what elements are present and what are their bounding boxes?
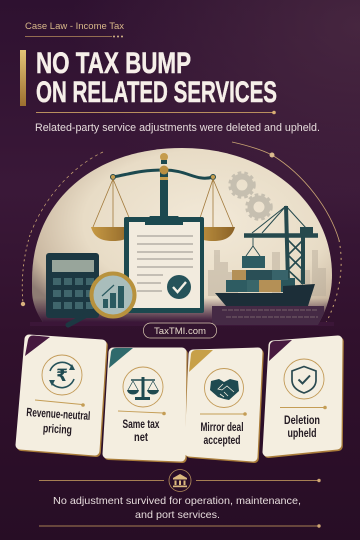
kicker: case law label — [25, 21, 124, 38]
scale left pan — [91, 174, 135, 241]
label: upheld — [288, 426, 316, 440]
kicker: case law label: Case Law - Income Tax — [25, 21, 124, 32]
bottom fade — [30, 298, 334, 322]
footer conclusion text: and port services. — [135, 509, 220, 521]
label: Same tax — [122, 417, 160, 431]
hero dome background — [32, 148, 332, 325]
footer divider with icon — [39, 470, 321, 492]
crane — [244, 206, 318, 284]
subtitle: Related-party service adjustments were deleted and upheld. — [35, 122, 320, 134]
card: revenue-neutral pricing — [20, 335, 103, 452]
icon: shield check — [284, 359, 324, 399]
footer conclusion text: No adjustment survived for operation, maintenance, — [53, 495, 301, 507]
label: accepted — [204, 433, 240, 447]
corner tab — [109, 348, 133, 368]
magnifier — [68, 274, 134, 325]
clipboard document — [124, 216, 204, 313]
check badge — [167, 275, 191, 299]
card: deletion upheld — [267, 340, 339, 454]
icon: scales — [123, 367, 163, 407]
card: mirror deal accepted — [189, 350, 259, 458]
gears — [230, 173, 271, 219]
calculator — [46, 253, 99, 318]
label: Mirror deal — [200, 420, 244, 434]
water — [212, 306, 324, 326]
label: net — [134, 430, 148, 444]
label — [25, 405, 91, 438]
label — [284, 413, 320, 440]
decorative arc: right — [232, 142, 341, 325]
title — [36, 47, 277, 109]
label: pricing — [43, 421, 72, 437]
skyline — [208, 250, 326, 296]
hero illustration — [30, 148, 334, 326]
label — [122, 417, 160, 444]
title accent bar — [20, 50, 26, 106]
card: same tax net — [107, 348, 183, 458]
source pill — [144, 323, 216, 338]
label — [200, 420, 244, 447]
scale right pan — [191, 174, 235, 241]
hanging container — [242, 256, 265, 268]
decorative arc: left — [21, 152, 103, 306]
title: NO TAX BUMP — [36, 47, 191, 80]
corner tab — [269, 340, 292, 361]
icon: courthouse — [169, 470, 191, 492]
label: Deletion — [284, 413, 320, 427]
label: Revenue-neutral — [26, 405, 91, 423]
corner tab — [25, 335, 50, 356]
footer conclusion text — [53, 495, 301, 521]
title rule — [36, 111, 276, 114]
corner tab — [189, 350, 213, 372]
footer rule — [39, 524, 321, 528]
cargo ship — [215, 270, 315, 306]
source pill: TaxTMI.com — [154, 326, 206, 337]
icon: handshake — [204, 368, 244, 408]
scale stand — [113, 153, 213, 218]
icon: rupee cycle: ₹ — [56, 366, 68, 385]
